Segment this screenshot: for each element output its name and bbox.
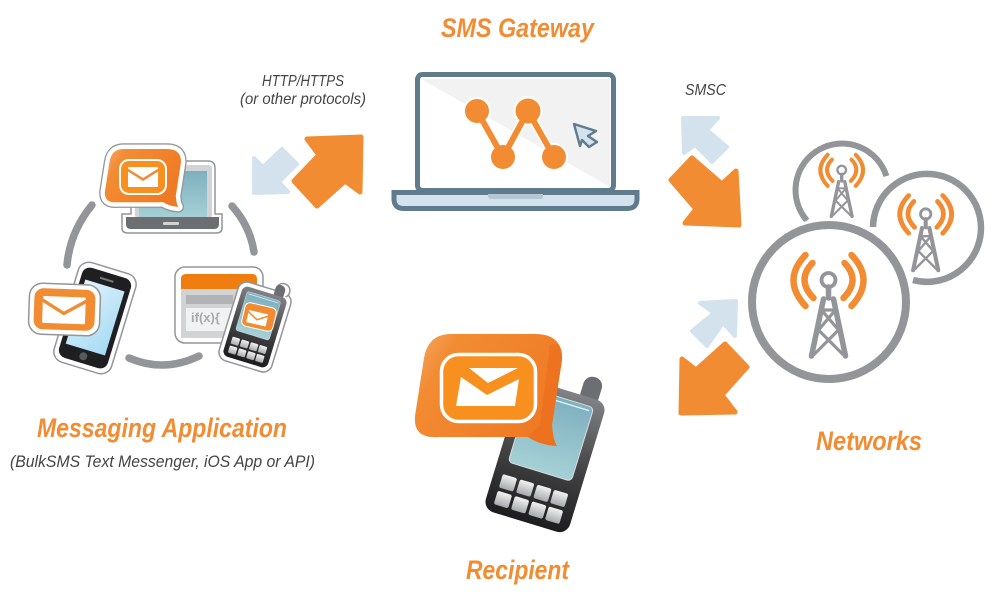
heading: Messaging Application: Messaging Application: [37, 413, 287, 443]
label: HTTP/HTTPS protocols: [240, 73, 366, 108]
icon: network towers: [745, 144, 987, 386]
arrow: to recipient: [681, 344, 747, 413]
title: SMS Gateway: SMS Gateway: [441, 13, 596, 43]
heading: Recipient: Recipient: [466, 555, 570, 585]
arrow: to SMSC: [671, 158, 739, 225]
label: SMSC: SMSC: [685, 82, 726, 99]
icon: gateway laptop: [394, 74, 637, 208]
arrow: from SMSC: [683, 118, 727, 162]
cycle arcs: [67, 205, 254, 365]
label: HTTP/HTTPS protocols: (or other protocols): [240, 91, 366, 108]
icon: smartphone with envelope: [28, 260, 139, 376]
icon: recipient phone with message bubble: [415, 334, 613, 535]
subheading: messaging application detail: (BulkSMS Text Messenger, iOS App or API): [10, 452, 315, 471]
arrow: to networks: [692, 301, 736, 346]
label: HTTP/HTTPS protocols: HTTP/HTTPS: [262, 73, 344, 90]
icon: laptop with bubble: [105, 149, 222, 233]
heading: Networks: Networks: [816, 426, 922, 456]
icon: API window with phone: if(x){: [191, 310, 220, 325]
arrow: to gateway: [294, 137, 361, 206]
arrow: from gateway: [254, 149, 297, 193]
icon: API window with phone: [175, 267, 296, 374]
